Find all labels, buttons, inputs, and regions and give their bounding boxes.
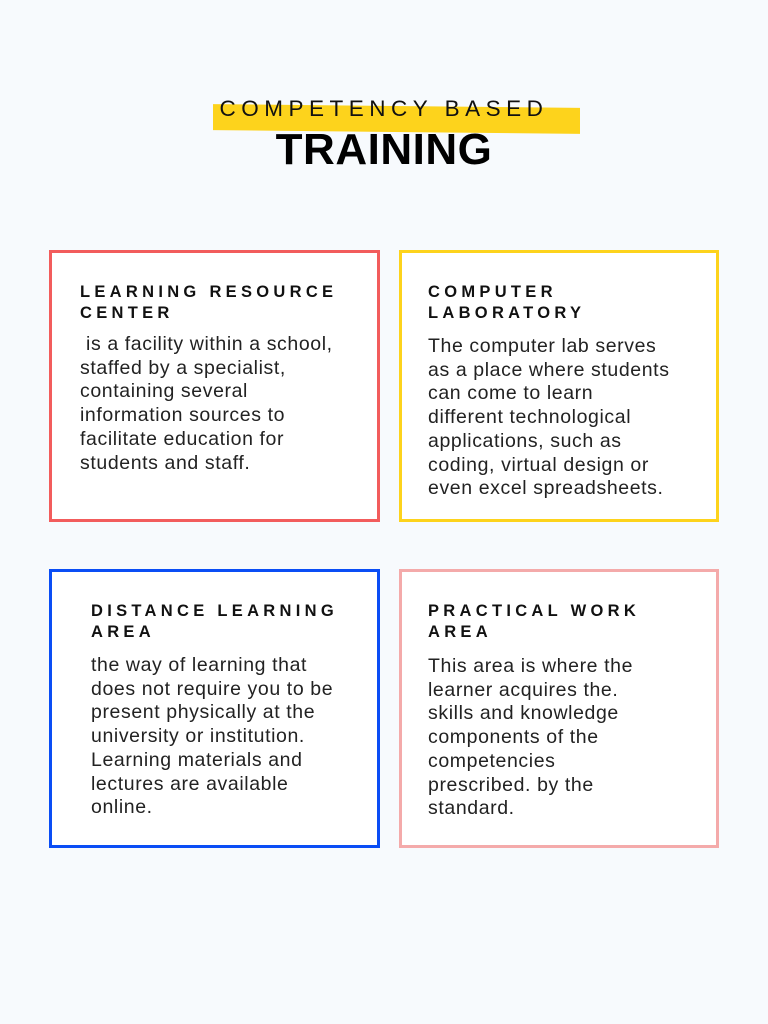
- text: facilitate education for: [80, 428, 284, 450]
- text: containing several: [80, 380, 248, 402]
- heading: AREA: [91, 623, 155, 641]
- text: skills and knowledge: [428, 702, 619, 724]
- text: This area is where the: [428, 655, 633, 677]
- panel: computer laboratory: [399, 250, 719, 522]
- panel: distance learning area: [49, 569, 380, 848]
- text: as a place where students: [428, 359, 670, 381]
- heading: DISTANCE LEARNING: [91, 602, 338, 620]
- text: present physically at the: [91, 701, 315, 723]
- heading: COMPUTER: [428, 283, 557, 301]
- text: [91, 654, 333, 818]
- heading: [91, 602, 338, 641]
- heading: AREA: [428, 623, 492, 641]
- heading: CENTER: [80, 304, 174, 322]
- text: competencies: [428, 750, 556, 772]
- text: [80, 333, 333, 474]
- heading: LABORATORY: [428, 304, 585, 322]
- text: [428, 335, 670, 499]
- text: does not require you to be: [91, 678, 333, 700]
- text: lectures are available: [91, 773, 288, 795]
- text: coding, virtual design or: [428, 454, 649, 476]
- text: staffed by a specialist,: [80, 357, 286, 379]
- text: applications, such as: [428, 430, 622, 452]
- text: information sources to: [80, 404, 285, 426]
- text: university or institution.: [91, 725, 305, 747]
- text: different technological: [428, 406, 631, 428]
- text: the way of learning that: [91, 654, 307, 676]
- panel: practical work area: [399, 569, 719, 848]
- heading: [428, 602, 640, 641]
- subtitle: COMPETENCY BASED: [220, 96, 548, 121]
- main title: TRAINING: [276, 125, 492, 174]
- text: can come to learn: [428, 382, 593, 404]
- text: even excel spreadsheets.: [428, 477, 664, 499]
- heading: [80, 283, 337, 322]
- text: The computer lab serves: [428, 335, 656, 357]
- text: components of the: [428, 726, 599, 748]
- heading: [428, 283, 585, 322]
- panel: learning resource center: [49, 250, 380, 522]
- text: [428, 655, 633, 819]
- text: standard.: [428, 797, 515, 819]
- text: prescribed. by the: [428, 774, 594, 796]
- highlight band: [213, 104, 580, 134]
- text: learner acquires the.: [428, 679, 618, 701]
- title: [213, 96, 580, 174]
- text: Learning materials and: [91, 749, 303, 771]
- heading: PRACTICAL WORK: [428, 602, 640, 620]
- heading: LEARNING RESOURCE: [80, 283, 337, 301]
- text: online.: [91, 796, 153, 818]
- text: is a facility within a school,: [86, 333, 333, 355]
- text: students and staff.: [80, 452, 250, 474]
